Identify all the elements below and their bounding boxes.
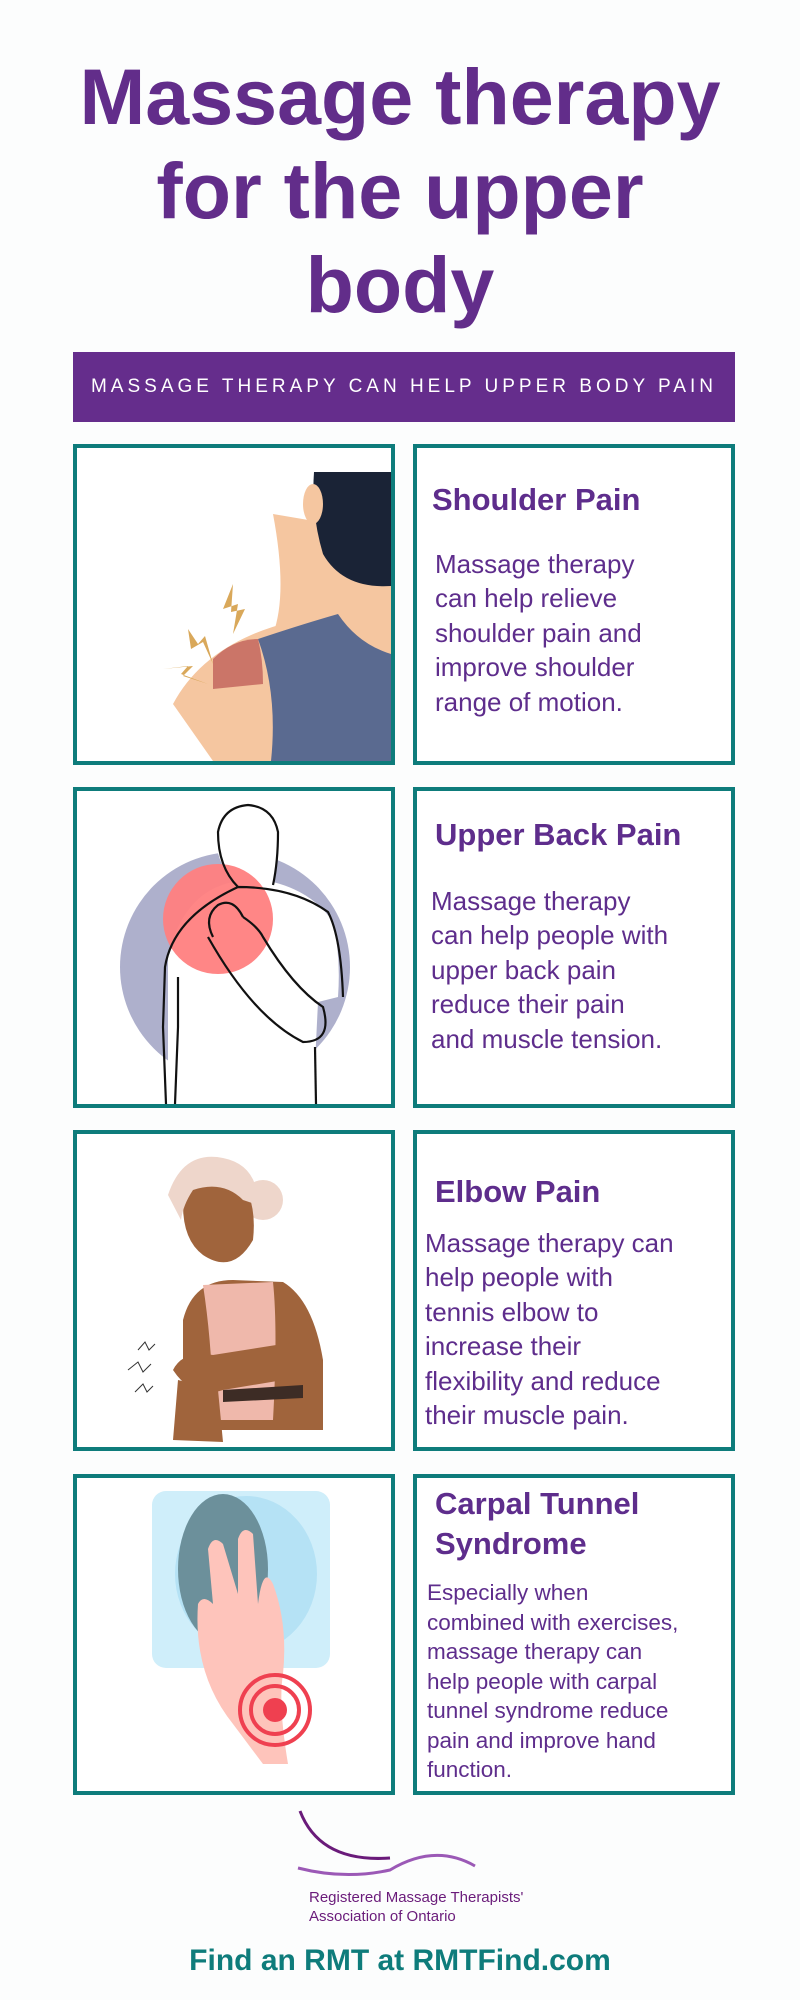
heading: Syndrome [435, 1526, 587, 1561]
heading [435, 1486, 639, 1561]
body text: increase their [425, 1331, 581, 1361]
body text: reduce their pain [431, 989, 625, 1019]
body text: tennis elbow to [425, 1297, 598, 1327]
body text: upper back pain [431, 955, 616, 985]
logo: Registered Massage Therapists' [309, 1889, 523, 1906]
body text [435, 549, 642, 717]
panel: upper back illustration [73, 787, 395, 1108]
banner [73, 352, 735, 422]
footer link: Find an RMT at RMTFind.com [189, 1944, 611, 1977]
body text: function. [427, 1757, 512, 1782]
body text: and muscle tension. [431, 1024, 662, 1054]
banner: MASSAGE THERAPY CAN HELP UPPER BODY PAIN [91, 376, 717, 397]
body text: Especially when [427, 1580, 588, 1605]
body text: Massage therapy [431, 886, 630, 916]
body text: tunnel syndrome reduce [427, 1698, 668, 1723]
body text: their muscle pain. [425, 1400, 629, 1430]
body text: can help relieve [435, 583, 617, 613]
body text: range of motion. [435, 687, 623, 717]
heading: Elbow Pain [435, 1174, 600, 1209]
icon: hand on mouse [152, 1491, 330, 1764]
title: body [306, 240, 494, 329]
body text: pain and improve hand [427, 1728, 656, 1752]
body text: shoulder pain and [435, 618, 642, 648]
body text: Massage therapy [435, 549, 634, 579]
panel: upper back text [413, 787, 735, 1108]
title: for the upper [156, 146, 644, 235]
panel: shoulder text [413, 444, 735, 765]
body text: Massage therapy can [425, 1228, 674, 1258]
body text: combined with exercises, [427, 1610, 678, 1634]
body text: improve shoulder [435, 652, 634, 682]
heading: Carpal Tunnel [435, 1486, 639, 1521]
icon: woman holding elbow [128, 1157, 323, 1442]
body text [427, 1580, 678, 1782]
body text: massage therapy can [427, 1639, 642, 1664]
icon: shoulder [163, 472, 391, 761]
body text: help people with [425, 1262, 613, 1292]
body text: help people with carpal [427, 1668, 657, 1694]
body text [425, 1228, 674, 1430]
panel: carpal text [413, 1474, 735, 1795]
panel: shoulder illustration [73, 444, 395, 765]
body text: can help people with [431, 920, 668, 950]
title: Massage therapy [79, 52, 721, 141]
logo [298, 1810, 523, 1925]
panel: elbow text [413, 1130, 735, 1451]
logo: Association of Ontario [309, 1908, 456, 1925]
title [79, 52, 721, 329]
panel: elbow illustration [73, 1130, 395, 1451]
panel: carpal tunnel illustration [73, 1474, 395, 1795]
icon: back figure [120, 802, 350, 1104]
heading: Upper Back Pain [435, 817, 681, 852]
body text: flexibility and reduce [425, 1366, 661, 1396]
body text [431, 886, 668, 1054]
heading: Shoulder Pain [432, 482, 640, 517]
